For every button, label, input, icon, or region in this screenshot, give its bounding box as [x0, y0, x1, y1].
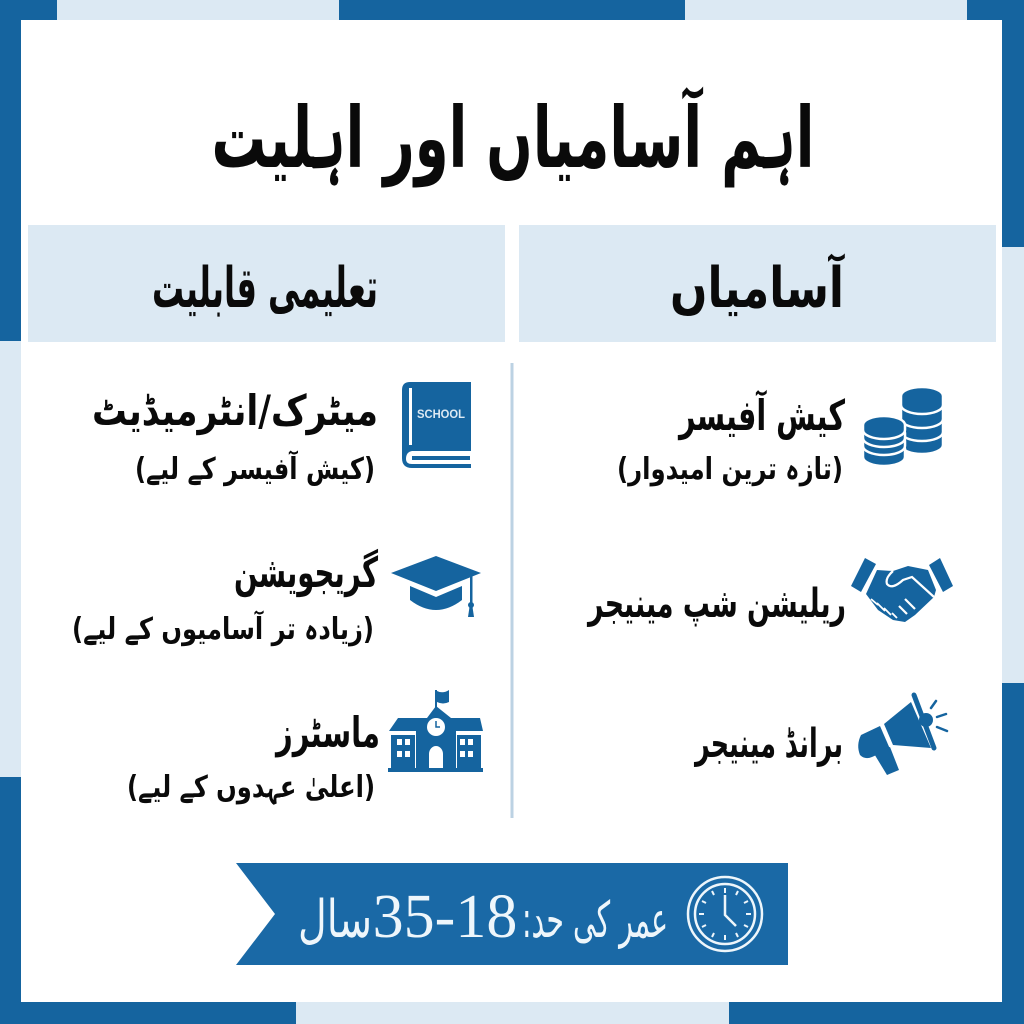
text: brand manager: برانڈ مینیجر	[694, 721, 843, 767]
banner: age limit: سال	[298, 890, 372, 950]
panel: vacancies header	[519, 225, 996, 342]
text: cash officer: (تازہ ترین امیدوار)	[617, 452, 843, 487]
panel: vacancies header: آسامیاں	[670, 253, 845, 321]
banner: age limit: 35-18	[373, 883, 517, 951]
panel: qualification header	[28, 225, 505, 342]
text: graduation: گریجویشن	[234, 548, 378, 598]
text: relationship manager: ریلیشن شپ مینیجر	[587, 581, 846, 627]
text: matric intermediate: (کیش آفیسر کے لیے)	[135, 450, 375, 487]
text: masters: ماسٹرز	[275, 708, 380, 758]
icon: handshake	[851, 558, 953, 622]
icon: clock	[688, 877, 762, 951]
panel: qualification header: تعلیمی قابلیت	[152, 256, 378, 321]
text: graduation	[72, 548, 378, 647]
icon: school book: SCHOOL	[417, 409, 465, 421]
text: matric intermediate: میٹرک/انٹرمیڈیٹ	[92, 386, 378, 436]
icon: graduation cap	[391, 556, 481, 617]
icon: coins	[863, 387, 943, 466]
text: matric intermediate	[92, 386, 378, 487]
banner: age limit: عمر کی حد:	[522, 891, 668, 949]
text: masters: (اعلیٰ عہدوں کے لیے)	[127, 770, 375, 805]
icon: megaphone	[858, 695, 947, 775]
text: cash officer: کیش آفیسر	[678, 390, 845, 441]
text: graduation: (زیادہ تر آسامیوں کے لیے)	[72, 610, 374, 647]
text: masters	[127, 708, 380, 805]
icon: school book	[402, 382, 471, 468]
banner: age limit	[236, 863, 788, 965]
icon: school building	[388, 690, 483, 772]
text: cash officer	[617, 390, 845, 487]
